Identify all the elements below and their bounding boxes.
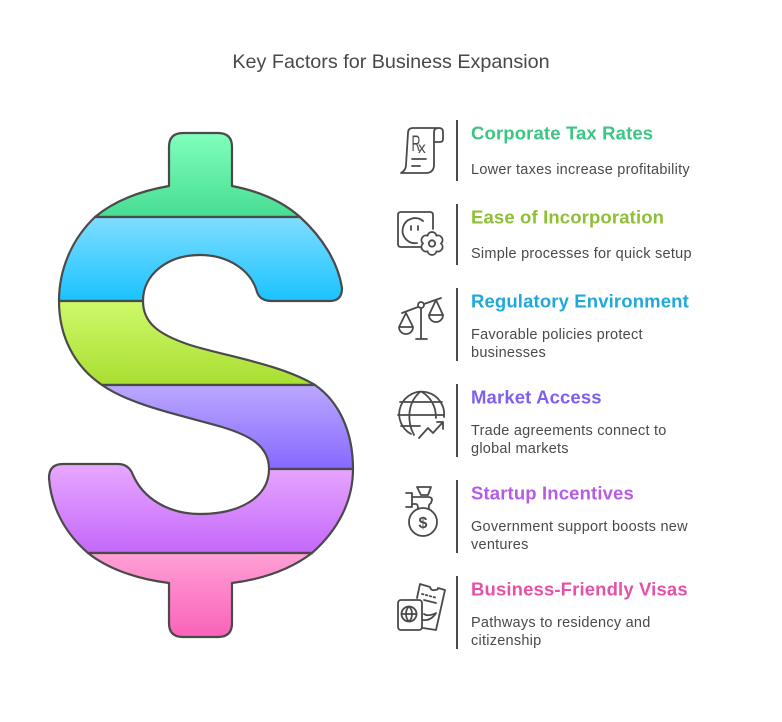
divider [456, 480, 458, 553]
title: Key Factors for Business Expansion [232, 51, 550, 73]
description: Favorable policies protect [471, 327, 643, 343]
heading: Regulatory Environment [471, 290, 689, 312]
row: startup incentives: ventures [471, 537, 529, 553]
segment: corporate tax rates [95, 133, 300, 217]
row: startup incentives [406, 480, 688, 553]
heading: Business-Friendly Visas [471, 578, 688, 600]
description: Lower taxes increase profitability [471, 162, 690, 178]
segment: business-friendly visas [88, 553, 312, 637]
icon: balance scale [399, 298, 443, 339]
divider [456, 384, 458, 457]
divider [456, 204, 458, 265]
row: regulatory environment: businesses [471, 345, 546, 361]
segment: regulatory environment [59, 301, 315, 385]
divider [456, 288, 458, 361]
icon: money bag [406, 487, 437, 536]
icon: face and gear [398, 212, 443, 255]
row: regulatory environment [399, 288, 689, 361]
icon: money bag: $ [419, 515, 428, 532]
segment: startup incentives [49, 464, 353, 553]
row: market access: global markets [471, 441, 569, 457]
row: corporate tax rates [401, 120, 690, 181]
heading: Startup Incentives [471, 482, 634, 504]
description: Trade agreements connect to [471, 423, 667, 439]
heading: Ease of Incorporation [471, 206, 664, 228]
icon: prescription scroll [401, 128, 443, 173]
description: Simple processes for quick setup [471, 246, 692, 262]
description: Government support boosts new [471, 519, 688, 535]
heading: Corporate Tax Rates [471, 122, 653, 144]
divider [456, 576, 458, 649]
description: Pathways to residency and [471, 615, 651, 631]
row: business-friendly visas [398, 576, 688, 649]
row: ease of incorporation [398, 204, 692, 265]
row: business-friendly visas: citizenship [471, 633, 541, 649]
segment: market access [102, 385, 353, 469]
icon: globe with growth arrow [398, 392, 444, 438]
heading: Market Access [471, 386, 602, 408]
divider [456, 120, 458, 181]
segment: ease of incorporation [59, 217, 342, 301]
icon: prescription scroll: x [418, 140, 426, 157]
icon: passport and ticket [398, 584, 445, 630]
icon: prescription scroll: R [412, 131, 420, 156]
row: market access [398, 384, 667, 457]
dollar sign chart [49, 133, 353, 637]
